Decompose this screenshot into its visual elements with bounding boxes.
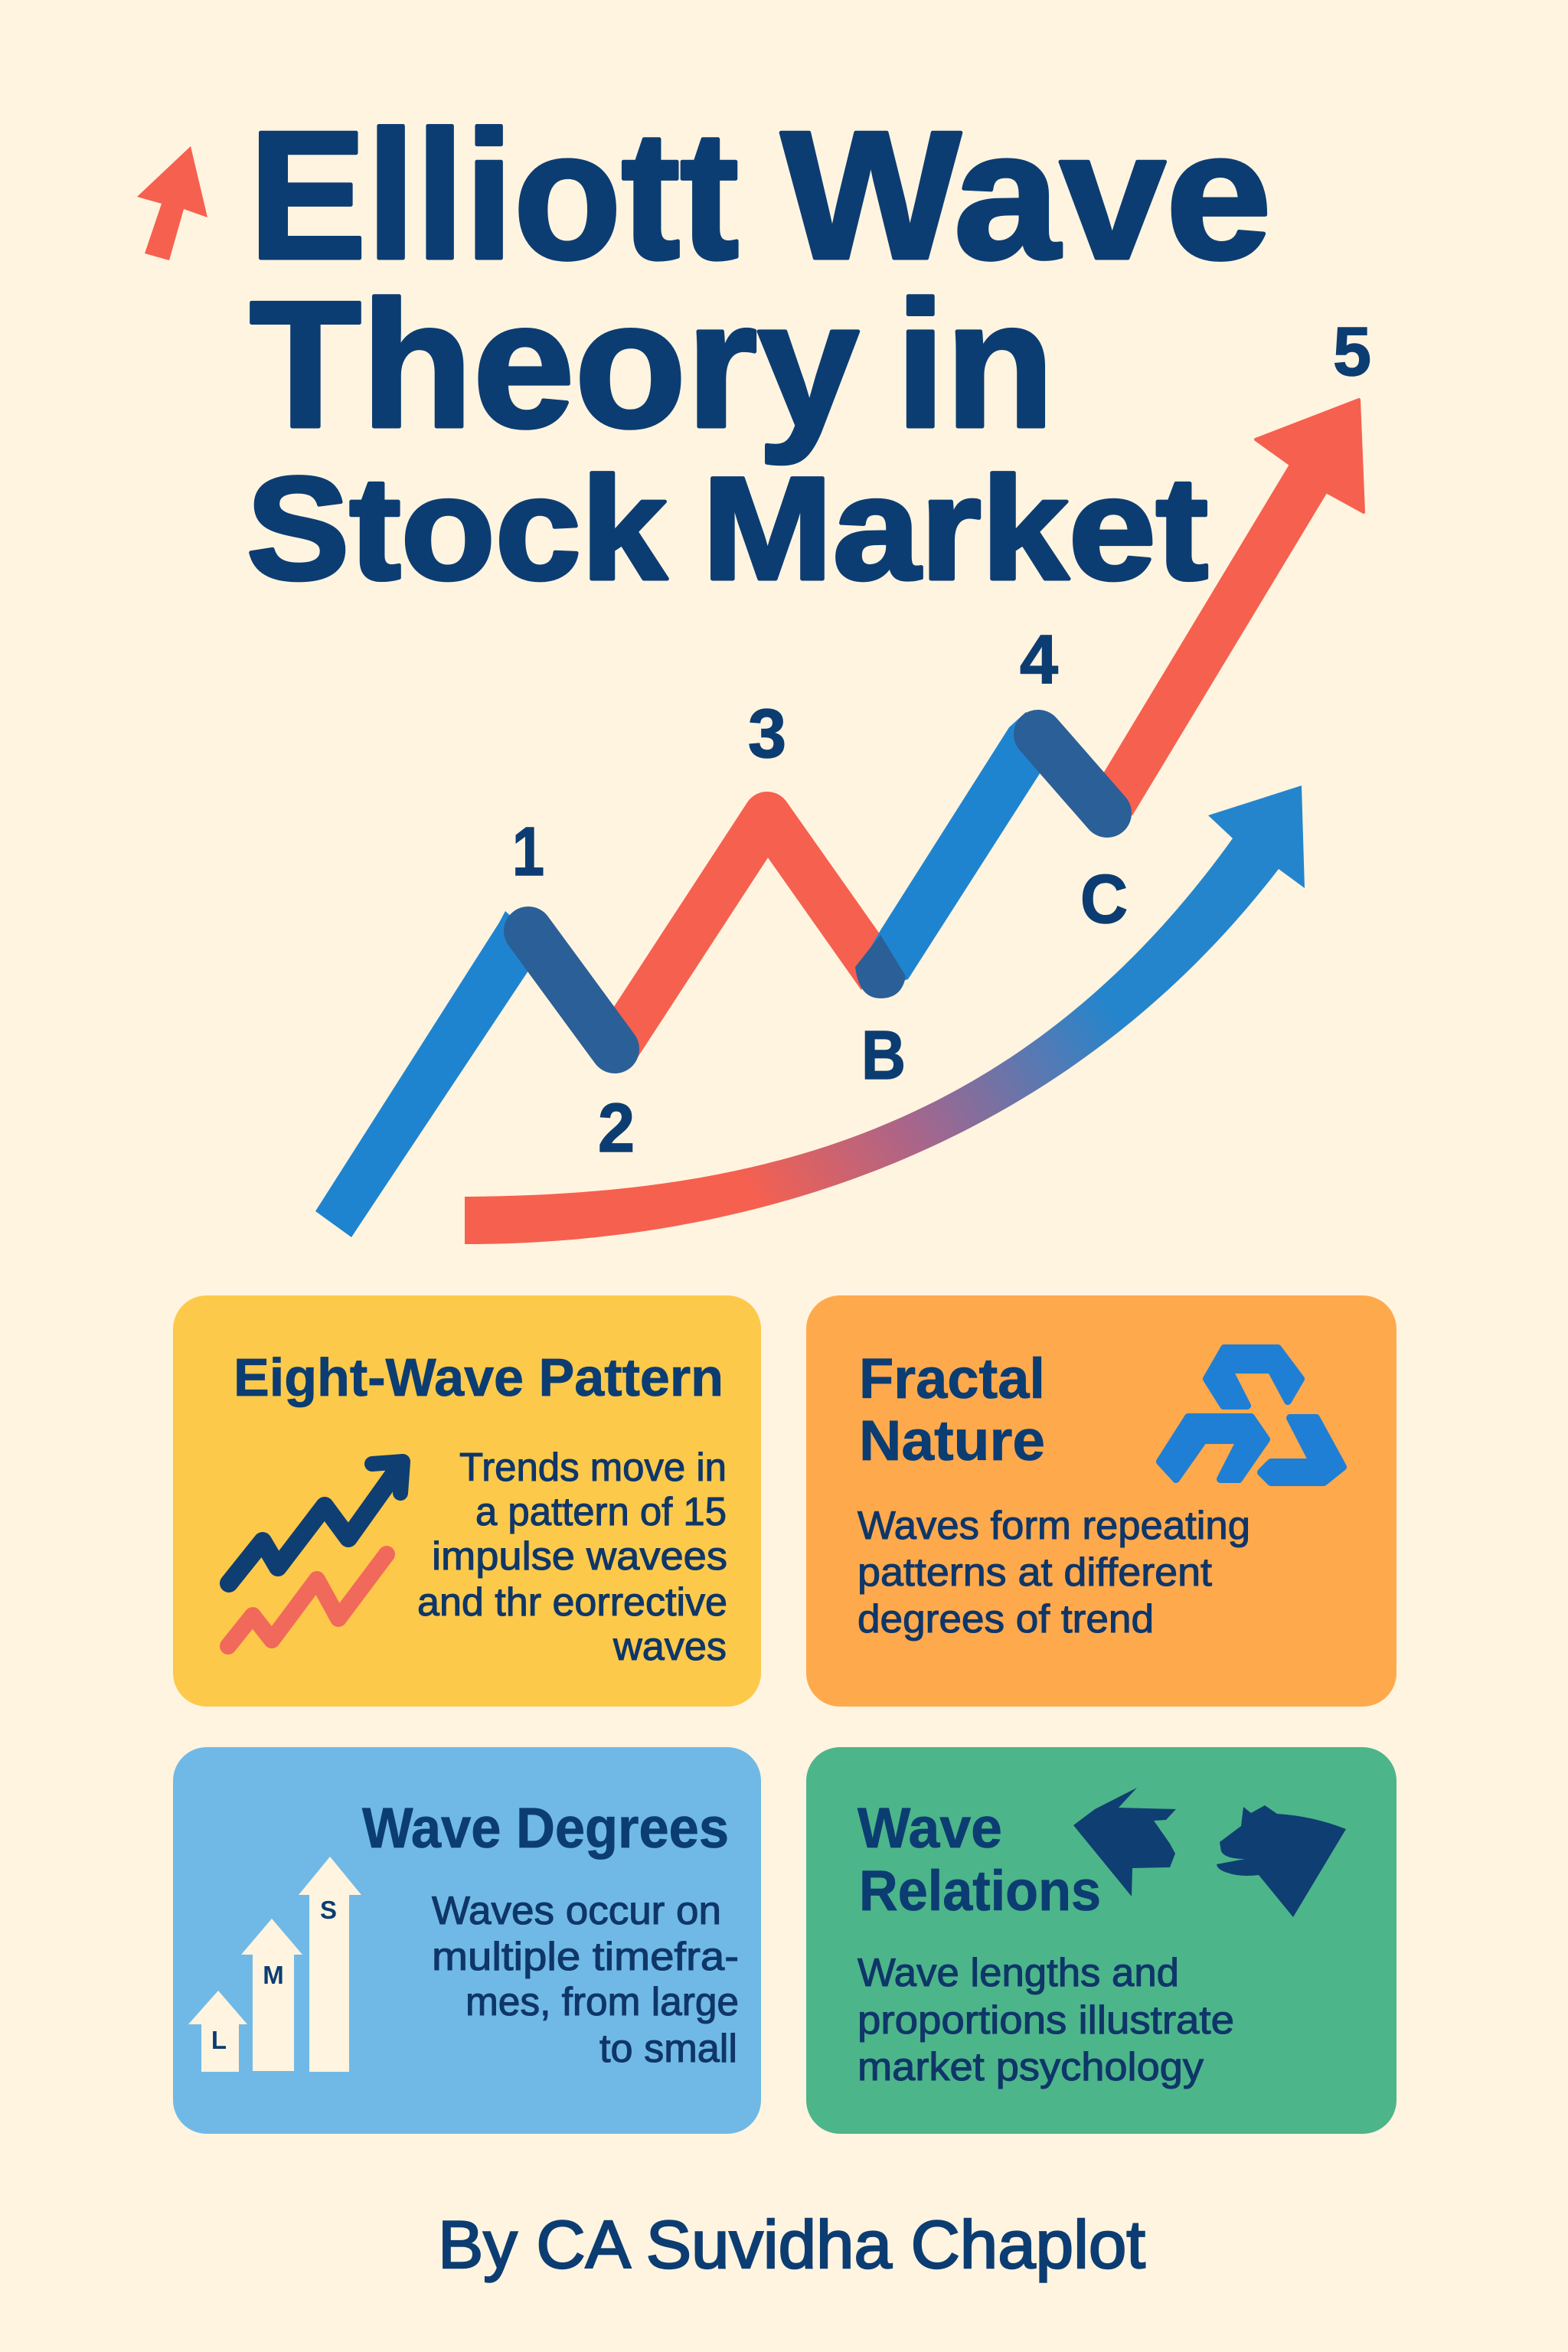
body text: degrees of trend xyxy=(858,1597,1154,1642)
heading: eight-wave pattern: Eight-Wave Pattern xyxy=(234,1348,724,1407)
title: in xyxy=(896,263,1054,465)
line: red final arrow wave 5 xyxy=(1106,400,1364,814)
title: Market xyxy=(702,447,1208,610)
body text: multiple timefra- xyxy=(432,1935,739,1979)
wave labels: C xyxy=(1080,861,1128,938)
wave labels: 4 xyxy=(1020,622,1058,698)
body text: mes, from large xyxy=(466,1980,739,2024)
body text: a pattern of 15 xyxy=(475,1490,727,1534)
icon: double zigzag arrows xyxy=(228,1462,403,1646)
icon: three rising arrows L M S: L xyxy=(211,2026,227,2054)
body text: patterns at different xyxy=(858,1550,1213,1595)
heading: fractal nature: Fractal xyxy=(859,1347,1045,1410)
title: Stock xyxy=(247,447,668,610)
heading: wave relations xyxy=(858,1796,1101,1922)
panel: wave relations xyxy=(806,1747,1396,2134)
wave labels: 1 xyxy=(512,814,544,890)
panel: wave degrees xyxy=(173,1747,761,2134)
icon: small red up arrow xyxy=(137,146,207,260)
panel: eight-wave pattern xyxy=(173,1295,761,1707)
line: red rising segment xyxy=(615,815,880,1049)
wave labels: 2 xyxy=(598,1090,635,1167)
arrow: gradient trend curve xyxy=(465,786,1305,1244)
icon: three rising arrows L M S: M xyxy=(263,1961,284,1989)
line: blue rising segment xyxy=(865,712,1053,988)
icon: three rising arrows L M S: S xyxy=(320,1896,337,1924)
line: dark corrective segment two xyxy=(1038,734,1107,813)
panel: fractal nature xyxy=(806,1295,1396,1707)
body text: to small xyxy=(599,2027,737,2071)
body text: and thr eorrective xyxy=(417,1580,727,1625)
body text: proportions illustrate xyxy=(858,1998,1234,2043)
heading: fractal nature xyxy=(859,1347,1045,1472)
title xyxy=(247,94,1272,610)
footer byline: By CA Suvidha Chaplot xyxy=(438,2207,1145,2282)
icon: bull head xyxy=(1073,1788,1176,1896)
body text: Waves form repeating xyxy=(858,1504,1250,1548)
body text: market psychology xyxy=(858,2045,1204,2089)
body text xyxy=(432,1889,739,2071)
icon: bear head xyxy=(1217,1805,1346,1917)
title: Theory xyxy=(250,263,859,465)
heading: wave degrees: Wave Degrees xyxy=(362,1796,729,1860)
wave chart xyxy=(315,314,1371,1244)
body text: Trends move in xyxy=(459,1446,727,1490)
title: Elliott xyxy=(249,94,739,297)
line: dark corrective segment one xyxy=(528,931,615,1049)
heading: fractal nature: Nature xyxy=(859,1409,1045,1472)
wave labels: 5 xyxy=(1333,314,1371,390)
line: wave segment blue rising xyxy=(315,911,539,1237)
icon: three rising arrows L M S xyxy=(188,1857,361,2072)
heading: wave relations: Wave xyxy=(858,1796,1002,1860)
wave labels: B xyxy=(861,1018,906,1094)
line: dark corrective valley B xyxy=(855,935,906,998)
title: Wave xyxy=(781,94,1272,297)
body text: waves xyxy=(612,1625,727,1669)
icon: fractal triangle knot xyxy=(1160,1348,1343,1482)
body text: impulse wavees xyxy=(432,1534,727,1579)
heading: wave relations: Relations xyxy=(859,1859,1101,1922)
wave labels: 3 xyxy=(748,696,786,773)
body text: Wave lengths and xyxy=(858,1951,1179,1995)
wave labels xyxy=(512,314,1371,1167)
body text xyxy=(858,1951,1234,2089)
body text xyxy=(417,1446,727,1669)
body text: Waves occur on xyxy=(432,1889,721,1933)
body text xyxy=(858,1504,1250,1642)
